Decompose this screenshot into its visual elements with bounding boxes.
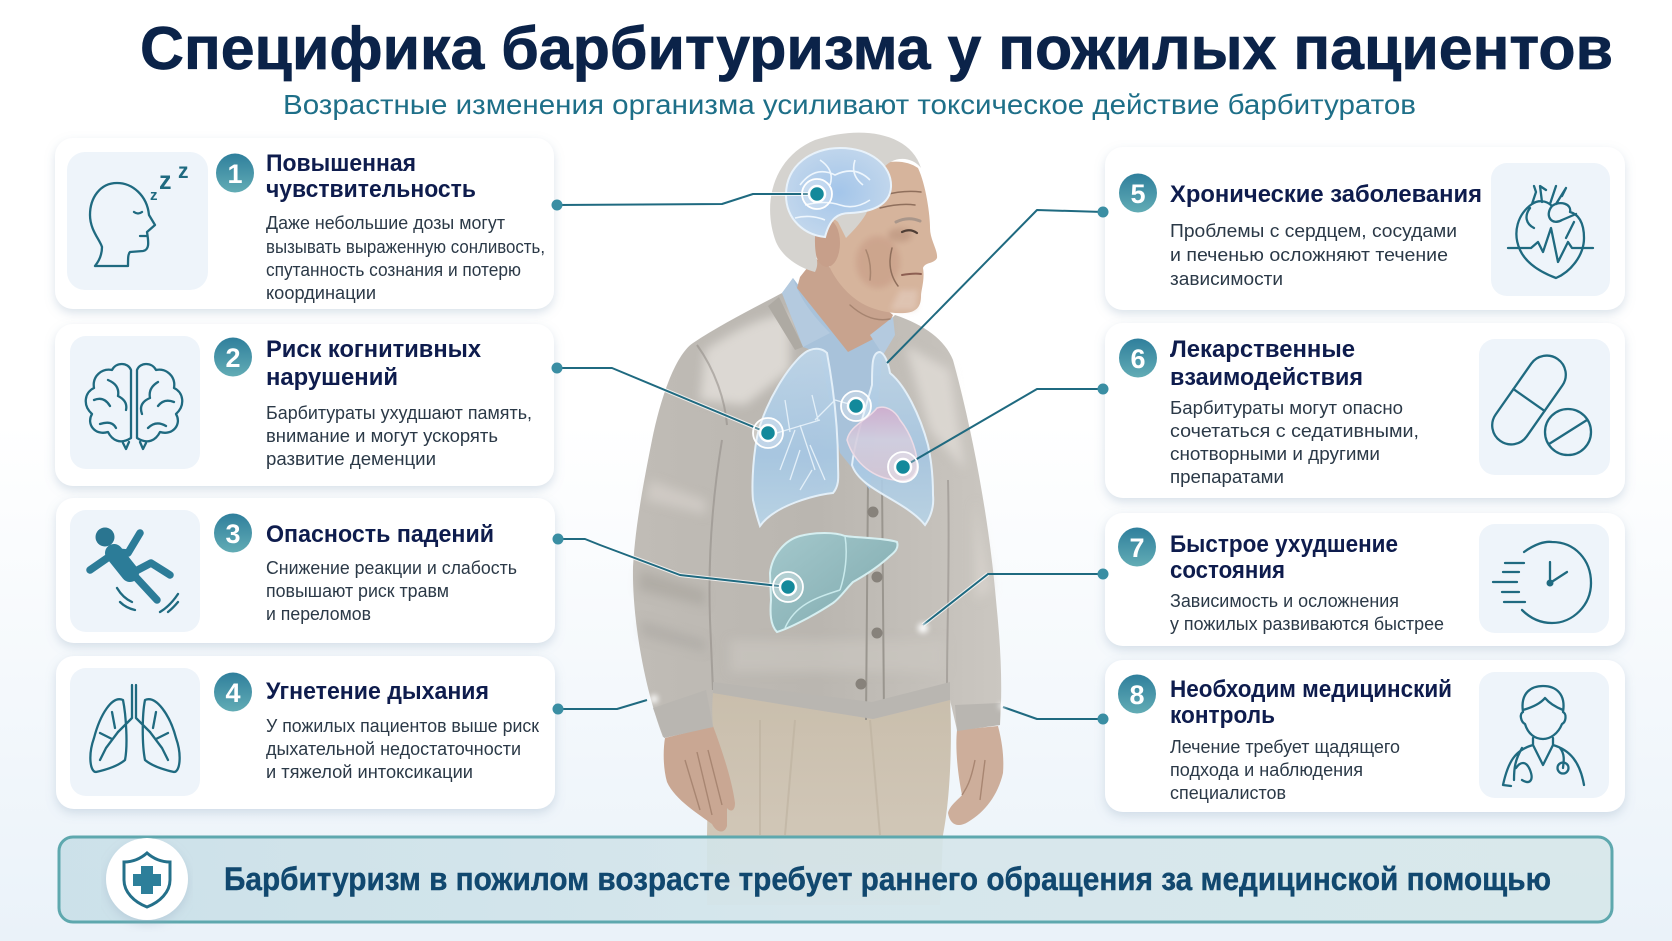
icon: sleeping head: z <box>150 187 158 204</box>
text 6: Барбитураты могут опасно <box>1170 398 1403 418</box>
left hand <box>664 726 735 832</box>
badge 5 <box>1119 174 1157 212</box>
text 6 <box>1170 398 1419 487</box>
panel: card 7 <box>1098 513 1625 646</box>
text 3: Снижение реакции и слабость <box>266 558 517 578</box>
heading 2: Риск когнитивных <box>266 336 482 363</box>
heading 8: Необходим медицинский <box>1170 676 1452 703</box>
connector dot 5 <box>1098 206 1108 218</box>
badge 1: 1 <box>227 159 243 189</box>
text 1: вызывать выраженную сонливость, <box>266 237 545 257</box>
lungs overlay <box>752 349 933 526</box>
banner: bottom message <box>59 837 1612 922</box>
shirt <box>782 278 893 490</box>
panel: card 1 <box>55 138 562 309</box>
badge 3 <box>214 514 252 552</box>
icon: sleeping head: z <box>178 160 188 183</box>
badge 7: 7 <box>1129 533 1145 563</box>
heading 7: Быстрое ухудшение <box>1170 531 1398 558</box>
badge 2 <box>214 338 252 376</box>
text 3: повышают риск травм <box>266 581 449 601</box>
panel: card 2 <box>55 324 562 486</box>
icon: brain <box>70 336 200 469</box>
sleeve seams <box>697 345 949 690</box>
icon: falling person <box>70 510 200 632</box>
heading 8 <box>1170 676 1452 729</box>
badge 4 <box>214 672 252 712</box>
badge 8 <box>1118 674 1156 714</box>
banner text: Барбитуризм в пожилом возрасте требует раннего обращения за медицинской помощью <box>224 861 1551 897</box>
text 5: зависимости <box>1170 269 1283 289</box>
badge 5: 5 <box>1130 179 1146 209</box>
text 1 <box>266 213 545 303</box>
icon: doctor <box>1479 672 1609 798</box>
badge 7 <box>1118 528 1156 566</box>
connector lines <box>557 194 1103 719</box>
icon: sleeping head <box>67 152 208 290</box>
text 5 <box>1170 221 1457 289</box>
badge 2: 2 <box>225 343 241 373</box>
text 2 <box>266 403 532 469</box>
hair <box>770 133 921 272</box>
panel: card 4 <box>56 656 564 809</box>
subtitle: Возрастные изменения организма усиливают токсическое действие барбитуратов <box>283 89 1416 120</box>
ear <box>814 219 840 267</box>
connector dot 3 <box>552 534 564 544</box>
text 3: и переломов <box>266 604 371 624</box>
cardigan collar band <box>768 297 803 350</box>
title: Специфика барбитуризма у пожилых пациентов <box>140 15 1613 82</box>
text 2: внимание и могут ускорять <box>266 426 498 446</box>
heading 7 <box>1170 531 1398 584</box>
badge 4: 4 <box>225 678 241 708</box>
liver overlay <box>770 533 898 632</box>
text 7: у пожилых развиваются быстрее <box>1170 614 1444 634</box>
connector dot 6 <box>1098 384 1108 394</box>
badge 1 <box>216 154 254 192</box>
text 6: препаратами <box>1170 467 1284 487</box>
text 8 <box>1170 737 1400 803</box>
heading 3: Опасность падений <box>266 521 494 548</box>
heading 2 <box>266 336 482 391</box>
connector dot 8 <box>1098 714 1108 724</box>
text 3 <box>266 558 517 624</box>
cardigan <box>633 293 1001 737</box>
text 7: Зависимость и осложнения <box>1170 591 1399 611</box>
connector dot 2 <box>552 362 562 374</box>
connector dot 1 <box>552 200 562 210</box>
panel: card 8 <box>1098 660 1625 812</box>
cardigan placket and buttons <box>856 480 884 720</box>
text 8: специалистов <box>1170 783 1286 803</box>
text 4: и тяжелой интоксикации <box>266 762 473 782</box>
heading 7: состояния <box>1170 557 1285 584</box>
face details <box>850 191 921 320</box>
heart overlay <box>847 407 917 481</box>
text 1: координации <box>266 283 376 303</box>
connector dot 4 <box>552 704 564 714</box>
panel: card 3 <box>56 498 564 643</box>
text 4: У пожилых пациентов выше риск <box>266 716 539 736</box>
icon: lungs <box>70 668 200 796</box>
heading 2: нарушений <box>266 364 398 391</box>
text 2: развитие деменции <box>266 449 436 469</box>
face <box>822 162 937 313</box>
text 1: Даже небольшие дозы могут <box>266 213 505 233</box>
heading 6: Лекарственные <box>1170 336 1355 363</box>
panel: card 5 <box>1098 147 1625 310</box>
icon: shield with cross <box>106 838 188 920</box>
brain overlay <box>786 148 891 237</box>
text 1: спутанность сознания и потерю <box>266 260 521 280</box>
icon: heart with pulse <box>1491 163 1610 296</box>
text 5: Проблемы с сердцем, сосудами <box>1170 221 1457 241</box>
neck <box>797 258 893 352</box>
panel: card 6 <box>1098 323 1625 498</box>
text 5: и печенью осложняют течение <box>1170 245 1448 265</box>
text 2: Барбитураты ухудшают память, <box>266 403 532 423</box>
heading 5: Хронические заболевания <box>1170 181 1482 208</box>
text 6: сочетаться с седативными, <box>1170 421 1419 441</box>
icon: pills <box>1479 339 1610 475</box>
badge 6: 6 <box>1130 344 1146 374</box>
text 4: дыхательной недостаточности <box>266 739 521 759</box>
heading 1 <box>266 150 476 203</box>
heading 4: Угнетение дыхания <box>266 678 489 705</box>
icon: fast clock <box>1479 524 1609 633</box>
right hand <box>948 726 1003 825</box>
text 8: подхода и наблюдения <box>1170 760 1363 780</box>
connector dot 7 <box>1098 568 1108 580</box>
cuffs and hem <box>653 682 1000 738</box>
heading 8: контроль <box>1170 702 1275 729</box>
trousers <box>707 690 951 905</box>
badge 3: 3 <box>225 519 241 549</box>
text 7 <box>1170 591 1444 634</box>
cardigan shading <box>638 315 992 672</box>
text 8: Лечение требует щадящего <box>1170 737 1400 757</box>
text 6: снотворными и другими <box>1170 444 1380 464</box>
badge 6 <box>1119 338 1157 378</box>
face shading <box>856 228 918 310</box>
central figure: elderly man <box>633 133 1003 905</box>
badge 8: 8 <box>1129 680 1145 710</box>
icon: sleeping head: z <box>159 167 172 195</box>
heading 1: Повышенная <box>266 150 416 177</box>
target markers on organs <box>650 179 1005 709</box>
collar <box>782 278 895 355</box>
text 4 <box>266 716 539 782</box>
heading 6 <box>1170 336 1363 391</box>
heading 1: чувствительность <box>266 176 476 203</box>
heading 6: взаимодействия <box>1170 364 1363 391</box>
